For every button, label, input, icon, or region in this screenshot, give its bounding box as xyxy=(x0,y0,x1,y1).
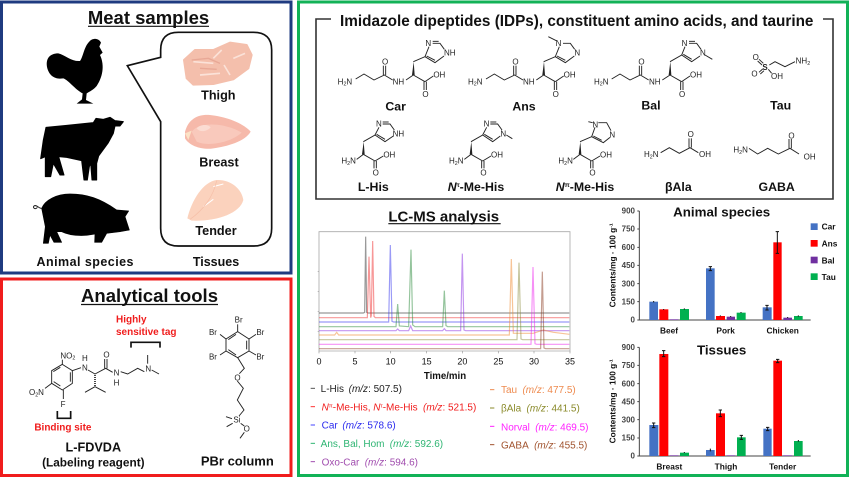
axis labels: time: 10 xyxy=(386,356,396,366)
molecule: L-FDVDA: H xyxy=(114,379,120,388)
annotation: highly sensitive tag: Highly xyxy=(116,315,147,326)
label: N-tau-Me-His: τ xyxy=(457,182,460,189)
molecule: L-FDVDA: 2 xyxy=(35,392,38,398)
molecule: Car: OH xyxy=(433,71,446,80)
molecule: GABA: N xyxy=(742,146,748,155)
molecule: Car: NH xyxy=(444,49,456,58)
molecule: L-FDVDA: O xyxy=(103,351,110,360)
heading: structures: Imidazole dipeptides (IDPs), constituent amino acids, and taurine xyxy=(340,13,813,30)
legend: Tau xyxy=(822,272,836,282)
molecule: Tau xyxy=(751,53,810,81)
bars: beef xyxy=(649,301,689,320)
molecule: N-tau-Me-His: O xyxy=(480,168,487,177)
y axis xyxy=(607,343,811,461)
molecule: GABA xyxy=(733,131,816,162)
y axis: 600 xyxy=(622,379,636,388)
molecule: Ans: N xyxy=(574,49,580,58)
molecule: N-tau-Me-His: 2 xyxy=(455,161,458,167)
legend item: Car: Car(m/z: 578.6) xyxy=(322,421,396,432)
panel: green analysis xyxy=(298,2,848,476)
molecule: Bal: N xyxy=(700,49,706,58)
icon: rooster silhouette xyxy=(47,39,103,104)
y axis: 300 xyxy=(622,415,636,424)
molecule: L-His: O xyxy=(373,168,379,177)
legend item: Oxo-Car: Oxo-Car(m/z: 594.6) xyxy=(322,458,418,469)
y axis xyxy=(607,207,811,325)
molecule: beta-alanine xyxy=(644,130,711,160)
label: N-tau-Me-His: N xyxy=(448,180,458,194)
molecule: L-FDVDA: H xyxy=(82,354,88,363)
y axis: 0 xyxy=(631,452,636,461)
molecule: Ans: NH xyxy=(523,77,535,86)
legend: Car xyxy=(822,222,836,232)
molecule: N-tau-Me-His: N xyxy=(484,119,490,128)
molecule: L-FDVDA: NO xyxy=(60,351,72,360)
axis labels: time: 35 xyxy=(565,356,575,366)
molecule: Ans: H xyxy=(468,77,474,86)
molecule: PBr column xyxy=(209,315,265,438)
y axis: 450 xyxy=(622,397,636,406)
molecule: PBr column: O xyxy=(234,373,241,382)
label: Bal: Bal xyxy=(641,99,661,113)
molecule: N-tau-Me-His xyxy=(449,119,512,177)
y axis: 150 xyxy=(622,297,636,306)
category labels: Chicken xyxy=(766,325,799,335)
molecule: L-FDVDA: N xyxy=(145,364,151,373)
structures box xyxy=(316,13,833,199)
category labels: Thigh xyxy=(715,462,737,472)
y axis: 900 xyxy=(622,207,636,216)
molecule: N-tau-Me-His: H xyxy=(449,157,455,166)
molecule: Car: O xyxy=(382,57,388,66)
category labels xyxy=(660,325,799,335)
y axis: 150 xyxy=(622,434,636,443)
molecule: N-pi-Me-His: 2 xyxy=(564,161,567,167)
molecule: GABA: 2 xyxy=(739,150,742,156)
heading: LC-MS analysis: LC-MS analysis xyxy=(388,209,499,226)
label: Car: Car xyxy=(385,99,406,113)
molecule: Bal: N xyxy=(603,77,609,86)
molecule: Bal: NH xyxy=(649,77,661,86)
molecule: Tau: 2 xyxy=(807,61,810,67)
label: N-pi-Me-His: π xyxy=(565,182,570,189)
molecule: Car: O xyxy=(422,90,429,99)
molecule: PBr column: Br xyxy=(235,315,243,324)
legend: Ans xyxy=(822,238,838,248)
molecule: PBr column: Br xyxy=(209,328,217,337)
molecule: N-pi-Me-His: OH xyxy=(600,150,612,159)
legend item: GABA: GABA(m/z: 455.5) xyxy=(501,440,587,451)
label: GABA: GABA xyxy=(759,180,795,194)
annotation: highly sensitive tag xyxy=(116,315,176,338)
y axis: -1 xyxy=(609,223,615,228)
molecule: Car: 2 xyxy=(343,82,346,88)
axis title: time: Time/min xyxy=(424,371,466,382)
label: beta-alanine: βAla xyxy=(665,180,692,194)
chart title: Tissues xyxy=(697,342,746,357)
image: thigh meat xyxy=(184,43,252,85)
molecule: L-FDVDA: N xyxy=(38,388,44,397)
axis labels: time: 25 xyxy=(493,356,503,366)
legend item: N-Me-His: N xyxy=(322,403,330,414)
legend: chromatogram xyxy=(311,371,588,469)
category labels: Beef xyxy=(660,325,678,335)
callout: tissues xyxy=(127,32,272,246)
label: breast: Breast xyxy=(199,156,239,170)
legend xyxy=(811,222,838,282)
icon: pig silhouette xyxy=(33,194,129,243)
legend item: L-His: L-His(m/z: 507.5) xyxy=(321,384,402,395)
molecule: N-tau-Me-His: N xyxy=(500,130,506,139)
category labels: Breast xyxy=(656,462,683,472)
category labels: Tender xyxy=(769,462,797,472)
label: labeling reagent: (Labeling reagent) xyxy=(42,456,145,470)
legend item: N-Me-His: -Me-His xyxy=(383,403,418,414)
molecule: N-pi-Me-His: O xyxy=(589,168,596,177)
y axis: 750 xyxy=(622,225,636,234)
y axis: 600 xyxy=(622,243,636,252)
label: N-pi-Me-His: N xyxy=(556,180,566,194)
molecule: PBr column: Si xyxy=(233,416,241,425)
molecule: Ans: O xyxy=(512,57,519,66)
molecule: L-FDVDA: 2 xyxy=(72,356,75,362)
molecule: GABA: OH xyxy=(804,153,816,162)
bars: pork xyxy=(706,267,746,320)
molecule: Ans: OH xyxy=(564,71,576,80)
molecule: N-pi-Me-His xyxy=(558,120,615,177)
molecule: L-His: OH xyxy=(383,150,396,159)
y axis: 450 xyxy=(622,261,636,270)
legend item: beta-alanine: βAla(m/z: 441.5) xyxy=(501,404,580,415)
image: breast meat xyxy=(185,115,251,149)
chart: tissues xyxy=(607,342,811,472)
molecule: N-pi-Me-His: N xyxy=(609,130,615,139)
molecule: Bal xyxy=(594,39,712,99)
y axis: Contents/mg · 100 g xyxy=(607,228,617,307)
chart: animal species xyxy=(607,204,838,335)
legend item: Norval: Norval(m/z: 469.5) xyxy=(501,422,588,433)
molecule: Ans: 2 xyxy=(474,82,477,88)
heading: meat samples: Meat samples xyxy=(88,7,209,28)
bars: breast xyxy=(649,351,689,456)
y axis: 900 xyxy=(622,343,636,352)
legend item: N-Me-His: π xyxy=(329,403,333,409)
label: N-tau-Me-His: -Me-His xyxy=(460,180,504,194)
molecule: PBr column: Br xyxy=(256,328,265,337)
molecule: beta-alanine: 2 xyxy=(650,154,653,160)
molecule: L-His: N xyxy=(376,119,382,128)
section: LC-MS analysis xyxy=(316,209,575,366)
molecule: beta-alanine: O xyxy=(688,130,694,139)
molecule: Bal: 2 xyxy=(600,82,603,88)
axis labels: time xyxy=(316,356,575,366)
molecule: Tau: O xyxy=(751,70,758,79)
molecule: Car: H xyxy=(338,77,343,86)
molecule: Ans: N xyxy=(477,77,483,86)
label: Tau: Tau xyxy=(770,99,791,113)
molecule: L-His: H xyxy=(341,157,347,166)
label: Ans: Ans xyxy=(512,99,536,113)
y axis: 0 xyxy=(631,316,636,325)
molecule: Bal: O xyxy=(679,90,685,99)
axis labels: time: 15 xyxy=(422,356,432,366)
label: tissues: Tissues xyxy=(193,255,239,269)
legend: Bal xyxy=(822,255,835,265)
molecule: Car xyxy=(338,39,456,99)
molecule: PBr column: Br xyxy=(256,352,265,361)
molecule: Tau: OH xyxy=(771,72,783,81)
label: L-FDVDA: L-FDVDA xyxy=(66,441,121,455)
molecule: Bal: H xyxy=(594,77,600,86)
category labels xyxy=(656,462,797,472)
legend item: N-Me-His: τ xyxy=(381,403,384,409)
bracket: sensitive tag xyxy=(131,342,160,348)
y axis: Contents/mg · 100 g xyxy=(607,364,617,443)
molecule: Tau: O xyxy=(753,53,759,62)
molecule: L-FDVDA: N xyxy=(114,369,120,378)
panel: analytical tools xyxy=(2,279,291,476)
molecule: N-tau-Me-His: OH xyxy=(491,150,503,159)
molecule: N-pi-Me-His: N xyxy=(567,157,573,166)
molecule: PBr column: Br xyxy=(209,352,217,361)
y axis: -1 xyxy=(609,359,615,364)
molecule: PBr column: O xyxy=(244,425,250,434)
molecule: Ans: N xyxy=(556,39,562,48)
label: tender: Tender xyxy=(195,224,237,238)
molecule: L-FDVDA: N xyxy=(82,364,88,373)
molecule: N-tau-Me-His: N xyxy=(458,157,464,166)
molecule: Car: NH xyxy=(393,77,404,86)
molecule: L-FDVDA: F xyxy=(61,400,66,409)
molecule: GABA: O xyxy=(788,131,795,140)
molecule: Tau: NH xyxy=(796,57,807,66)
molecule: L-His: NH xyxy=(393,130,404,139)
legend item: N-Me-His: N xyxy=(373,403,381,414)
icon: cow silhouette xyxy=(41,117,123,180)
y axis: 300 xyxy=(622,279,636,288)
molecule: beta-alanine: N xyxy=(653,150,659,159)
legend item: N-Me-His: (m/z: 521.5) xyxy=(423,403,476,414)
bars: thigh xyxy=(706,410,746,456)
molecule: L-FDVDA xyxy=(29,351,159,409)
panel: meat samples xyxy=(2,2,291,273)
molecule: Ans xyxy=(468,37,580,99)
label: animal species: Animal species xyxy=(36,255,134,269)
molecule: beta-alanine: OH xyxy=(699,150,711,159)
legend item: Ans Bal Hom: Ans, Bal, Hom(m/z: 592.6) xyxy=(321,439,443,450)
label: thigh: Thigh xyxy=(201,88,236,102)
label: L-His: L-His xyxy=(358,180,389,194)
bars: tender xyxy=(763,359,803,456)
chart: chromatogram xyxy=(318,232,570,353)
molecule: L-His xyxy=(341,119,404,177)
image: tender meat xyxy=(187,180,243,221)
molecule: GABA: H xyxy=(733,146,739,155)
axis labels: time: 20 xyxy=(457,356,467,366)
molecule: Bal: O xyxy=(638,57,645,66)
bracket: binding site xyxy=(57,411,71,418)
axis labels: time: 5 xyxy=(352,356,357,366)
legend item: N-Me-His: -Me-His, xyxy=(333,403,373,414)
axis labels: time: 30 xyxy=(529,356,539,366)
molecule: N-pi-Me-His: H xyxy=(558,157,564,166)
molecule: Car: N xyxy=(425,39,431,48)
bars: chicken xyxy=(763,232,803,320)
molecule: Ans: O xyxy=(553,90,559,99)
category labels: Pork xyxy=(716,325,735,335)
label: PBr column: PBr column xyxy=(201,454,274,469)
molecule: Tau: S xyxy=(762,63,768,72)
annotation: binding site: Binding site xyxy=(34,423,92,434)
legend item: Tau: Tau(m/z: 477.5) xyxy=(501,385,576,396)
molecule: L-His: N xyxy=(350,157,356,166)
molecule: beta-alanine: H xyxy=(644,150,650,159)
label: N-pi-Me-His: -Me-His xyxy=(570,180,614,194)
axis labels: time: 0 xyxy=(316,356,321,366)
y axis: 750 xyxy=(622,361,636,370)
molecule: N-pi-Me-His: N xyxy=(592,120,598,129)
molecule: Car: N xyxy=(346,77,352,86)
molecule: L-His: 2 xyxy=(347,161,350,167)
chart title: Animal species xyxy=(673,204,770,219)
molecule: L-FDVDA: O xyxy=(29,388,35,397)
heading: analytical tools: Analytical tools xyxy=(81,285,218,306)
molecule: Bal: OH xyxy=(690,71,702,80)
annotation: highly sensitive tag: sensitive tag xyxy=(116,327,176,338)
molecule: Bal: N xyxy=(682,39,688,48)
